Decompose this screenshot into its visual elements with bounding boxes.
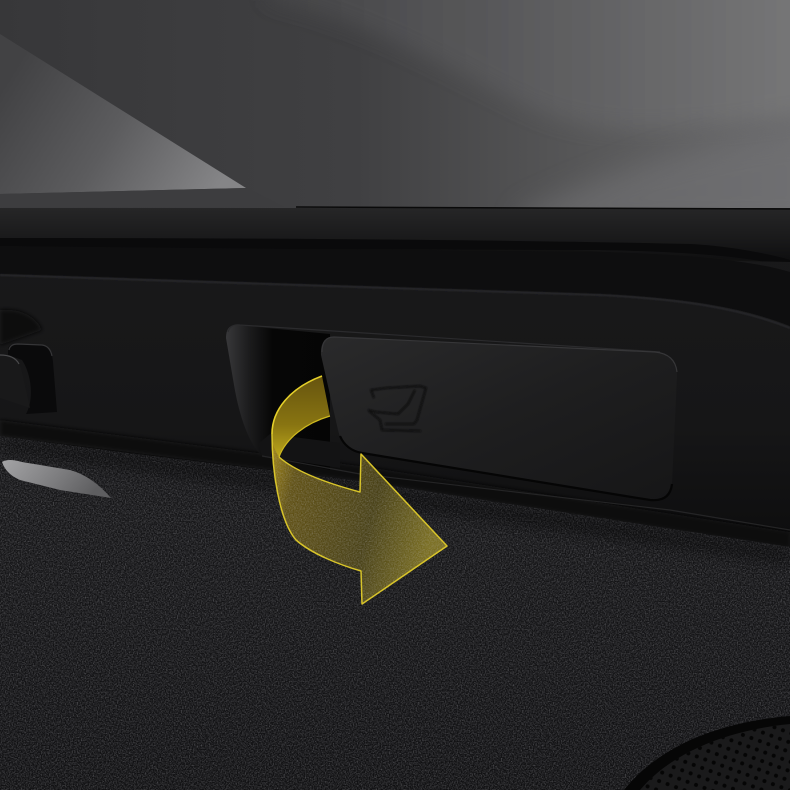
- release handle recess: [226, 325, 790, 530]
- trim panel: [0, 246, 790, 548]
- icon: seat folding symbol: [368, 386, 426, 431]
- left latch: [0, 310, 57, 414]
- parcel shelf ledge: [0, 207, 790, 268]
- arrow: yellow translucent folding direction: [270, 376, 450, 606]
- carpet floor: [0, 430, 790, 790]
- arrow upper band: [272, 376, 330, 457]
- release handle lid: [321, 337, 677, 500]
- side plate light: [2, 460, 111, 498]
- speaker grille: [624, 716, 790, 790]
- arrow lower body: [272, 434, 447, 604]
- rear window glass: [0, 0, 790, 230]
